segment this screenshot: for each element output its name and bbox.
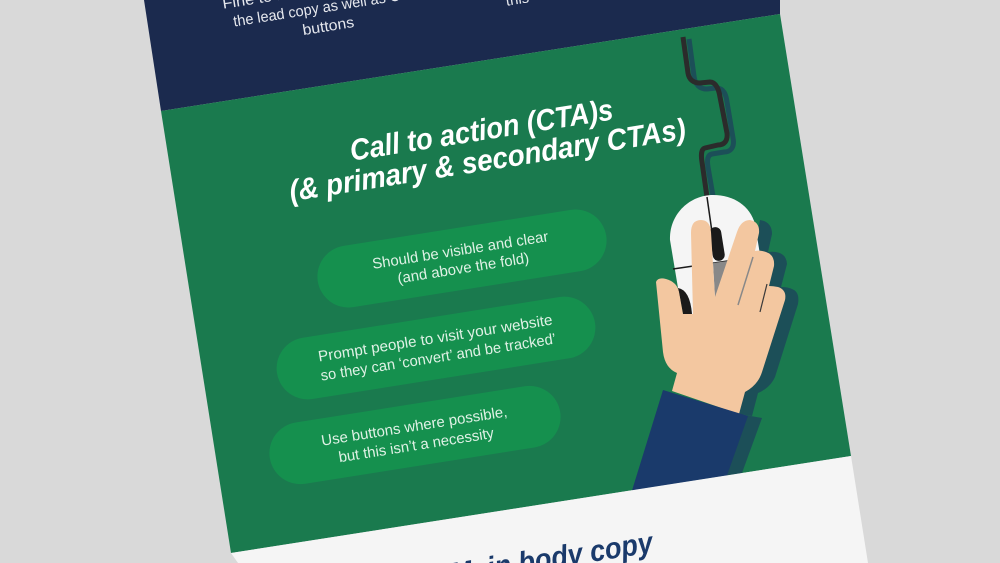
panel: white body copy section (231, 456, 868, 563)
icon: cable (683, 37, 727, 197)
text block: lead copy note (221, 0, 530, 39)
pill: prompt people (272, 292, 600, 404)
icon: hand (656, 220, 785, 414)
pill: use buttons: Use buttons where possible, (320, 403, 508, 450)
illustration: hand on mouse (632, 37, 798, 490)
icon: mouse scroll wheel (708, 226, 726, 262)
text block: lead copy note: buttons (301, 14, 355, 39)
icon: computer mouse (670, 195, 765, 318)
panel: navy top section (144, 0, 780, 111)
panel: green call to action section (161, 14, 851, 553)
pill: visible and clear: Should be visible and clear (371, 228, 550, 273)
pill: use buttons (265, 381, 565, 489)
icon: sleeve shadow (725, 415, 762, 476)
pill: prompt people: so they can ‘convert’ and be tracked’ (319, 331, 557, 385)
pill: use buttons: but this isn’t a necessity (337, 425, 496, 466)
pill: prompt people: Prompt people to visit your website (317, 312, 554, 365)
pill: visible and clear (313, 205, 611, 312)
icon: cable shadow (689, 39, 733, 196)
heading: call to action: (& primary & secondary CTAs) (287, 113, 688, 208)
heading: call to action: Call to action (CTA)s (348, 94, 615, 168)
icon: hand shadow (739, 220, 798, 416)
icon: finger separators (738, 257, 767, 312)
icon: sleeve (632, 390, 748, 490)
pill: visible and clear: (and above the fold) (396, 250, 530, 287)
